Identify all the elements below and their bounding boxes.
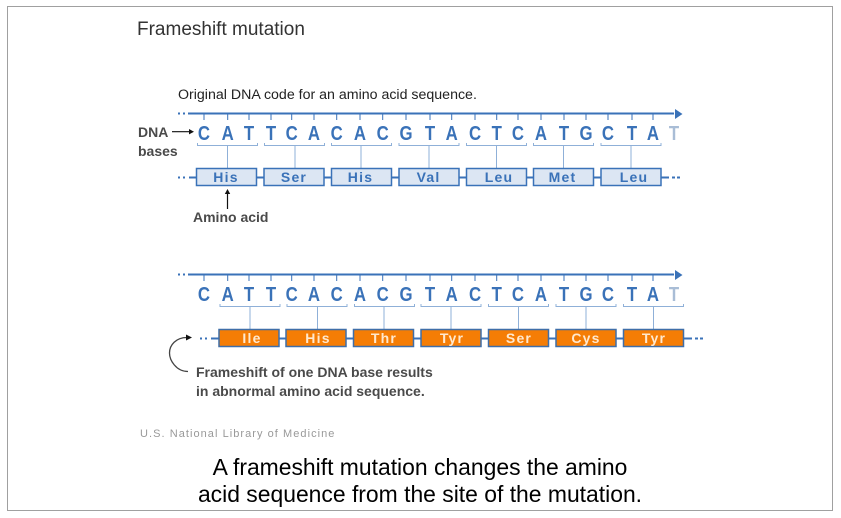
- shifted DNA letters: C: [469, 283, 481, 305]
- shifted DNA letters: T: [492, 283, 503, 305]
- caption: A frameshift mutation changes the amino: [213, 454, 627, 480]
- curved arrow: [170, 334, 192, 372]
- original DNA letters: C: [286, 122, 298, 144]
- original amino acid chain: Val: [417, 169, 440, 185]
- caption: acid sequence from the site of the mutation.: [198, 481, 642, 507]
- original DNA letters: A: [354, 122, 366, 144]
- shifted DNA letters: A: [647, 283, 659, 305]
- original DNA letters: T: [425, 122, 436, 144]
- shifted DNA letters: G: [579, 283, 593, 305]
- original amino acid chain: Leu: [485, 169, 513, 185]
- shifted DNA letters: A: [308, 283, 320, 305]
- abnormal amino acid chain: Cys: [571, 330, 601, 346]
- label: DNA bases: bases: [138, 143, 178, 159]
- subtitle: original DNA code: Original DNA code for an amino acid sequence.: [178, 87, 477, 103]
- frameshift note: [196, 364, 433, 399]
- shifted DNA letters: T: [559, 283, 570, 305]
- shifted DNA letters: T: [669, 283, 680, 305]
- original DNA letters: [198, 122, 680, 144]
- original DNA letters: T: [266, 122, 277, 144]
- original amino acid chain: His: [213, 169, 239, 185]
- shifted DNA letters: C: [377, 283, 389, 305]
- original DNA letters: A: [647, 122, 659, 144]
- shifted codon brackets: [220, 304, 684, 329]
- shifted DNA letters: G: [399, 283, 413, 305]
- abnormal amino acid chain: Tyr: [440, 330, 464, 346]
- original DNA strand: [178, 109, 682, 168]
- shifted DNA letters: A: [446, 283, 458, 305]
- abnormal amino acid chain: Ile: [242, 330, 262, 346]
- abnormal amino acid chain: Ser: [506, 330, 532, 346]
- original DNA letters: C: [469, 122, 481, 144]
- shifted DNA letters: C: [331, 283, 343, 305]
- original DNA letters: T: [669, 122, 680, 144]
- original DNA letters: T: [492, 122, 503, 144]
- original DNA letters: G: [579, 122, 593, 144]
- original amino acid chain: Leu: [620, 169, 648, 185]
- shifted DNA letters: A: [535, 283, 547, 305]
- shifted DNA letters: C: [512, 283, 524, 305]
- abnormal amino acid chain: [200, 330, 703, 346]
- shifted DNA letters: C: [198, 283, 210, 305]
- shifted DNA letters: A: [222, 283, 234, 305]
- frameshift note: in abnormal amino acid sequence.: [196, 383, 425, 399]
- caption: [198, 454, 642, 507]
- label: DNA bases: DNA: [138, 124, 168, 140]
- shifted DNA strand: [178, 270, 684, 329]
- original DNA letters: C: [512, 122, 524, 144]
- original DNA letters: A: [446, 122, 458, 144]
- original DNA letters: T: [627, 122, 638, 144]
- original DNA letters: C: [331, 122, 343, 144]
- shifted DNA letters: C: [286, 283, 298, 305]
- label: amino acid: Amino acid: [193, 209, 268, 225]
- frameshift note: Frameshift of one DNA base results: [196, 364, 433, 380]
- original DNA letters: C: [198, 122, 210, 144]
- title: Frameshift mutation: [137, 19, 305, 40]
- original DNA letters: T: [559, 122, 570, 144]
- shifted DNA letters: T: [244, 283, 255, 305]
- original DNA letters: A: [535, 122, 547, 144]
- original amino acid chain: Met: [549, 169, 576, 185]
- abnormal amino acid chain: Tyr: [642, 330, 666, 346]
- original DNA letters: A: [222, 122, 234, 144]
- shifted DNA letters: A: [354, 283, 366, 305]
- abnormal amino acid chain: His: [305, 330, 331, 346]
- original DNA letters: T: [244, 122, 255, 144]
- label: amino acid: [193, 189, 268, 225]
- original DNA letters: A: [308, 122, 320, 144]
- shifted DNA letters: T: [627, 283, 638, 305]
- shifted DNA letters: T: [266, 283, 277, 305]
- shifted DNA letters: C: [602, 283, 614, 305]
- label: DNA bases: [138, 124, 194, 159]
- original DNA letters: G: [399, 122, 413, 144]
- abnormal amino acid chain: Thr: [371, 330, 397, 346]
- codon brackets: [198, 143, 661, 168]
- original amino acid chain: His: [348, 169, 373, 185]
- original DNA letters: C: [602, 122, 614, 144]
- shifted DNA letters: [198, 283, 680, 305]
- original amino acid chain: [178, 168, 680, 186]
- original amino acid chain: Ser: [281, 169, 307, 185]
- shifted DNA letters: T: [425, 283, 436, 305]
- original DNA letters: C: [377, 122, 389, 144]
- credit: U.S. National Library of Medicine: [140, 428, 335, 440]
